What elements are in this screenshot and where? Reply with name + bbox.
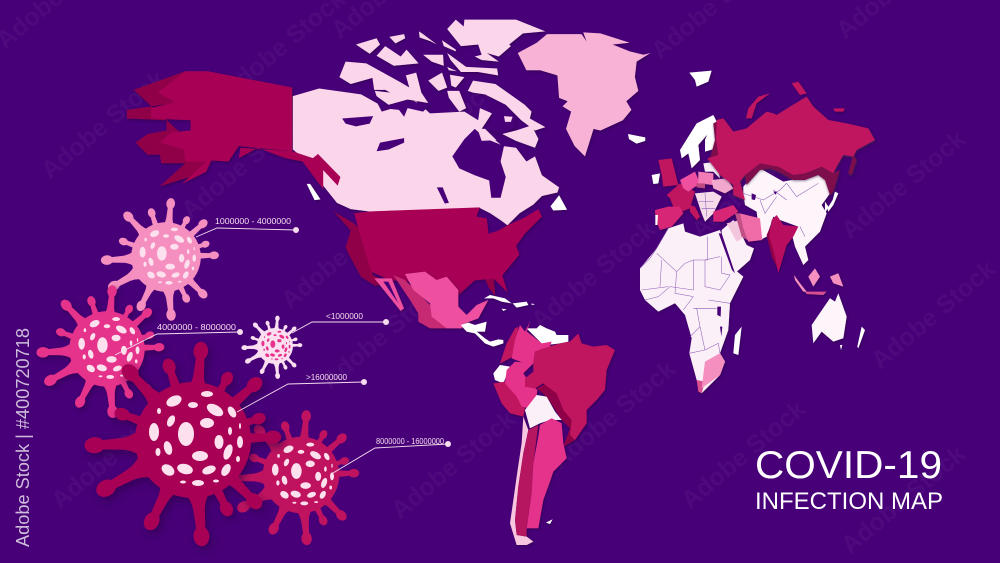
Austria and Czechia bbox=[697, 183, 705, 188]
Germany bbox=[680, 172, 700, 192]
Colombia shadow bbox=[500, 327, 518, 363]
Ireland bbox=[652, 173, 660, 184]
virus: over 16000000 bbox=[83, 340, 282, 549]
stock watermark pattern: Adobe Stock bbox=[46, 395, 181, 515]
stock image credit: Adobe Stock | #400720718 bbox=[13, 328, 33, 547]
Africa bbox=[640, 223, 743, 393]
Indonesia bbox=[794, 268, 843, 295]
Baltics and Belarus bbox=[703, 162, 720, 178]
Turkey bbox=[713, 205, 738, 222]
callout: 8000000 - 16000000: 8000000 - 16000000 bbox=[376, 437, 444, 446]
USA shadow layer bbox=[334, 211, 390, 286]
Russia bbox=[707, 97, 875, 200]
Falkland Islands bbox=[546, 519, 553, 524]
stock watermark pattern: Adobe Stock bbox=[546, 355, 681, 475]
callout: 4000000 - 8000000 bbox=[115, 323, 243, 355]
virus: 8000000 - 16000000 bbox=[228, 409, 360, 547]
callout: under 1000000: <1000000 bbox=[326, 312, 364, 321]
Balkans bbox=[695, 192, 722, 222]
virus: 4000000 - 8000000 bbox=[36, 284, 165, 420]
Caribbean bbox=[484, 295, 535, 311]
callout: 1000000 - 4000000 bbox=[196, 217, 299, 237]
callout: under 1000000 bbox=[292, 312, 389, 333]
map: North America bbox=[127, 20, 650, 296]
Asia bbox=[743, 168, 832, 265]
South Africa bbox=[697, 380, 705, 393]
Scandinavia bbox=[680, 115, 717, 168]
Canada bbox=[293, 20, 559, 225]
Vancouver Island bbox=[307, 184, 320, 200]
Spain bbox=[655, 207, 683, 230]
Ukraine bbox=[712, 178, 733, 193]
Brazil shadow bbox=[537, 383, 575, 447]
Alaska shadow layer bbox=[127, 71, 210, 186]
Italy bbox=[690, 205, 700, 220]
stock watermark pattern: Adobe Stock bbox=[526, 215, 661, 335]
Portugal bbox=[655, 215, 658, 225]
Peru bbox=[505, 362, 537, 410]
Poland bbox=[698, 172, 713, 185]
United Kingdom bbox=[658, 158, 678, 187]
map: Europe, Africa, Asia, Oceania bbox=[640, 71, 875, 393]
title: COVID-19 bbox=[755, 444, 942, 487]
Argentina bbox=[527, 418, 567, 528]
Chile outer bbox=[510, 417, 533, 545]
Svalbard bbox=[689, 71, 712, 87]
callout: 4000000 - 8000000: 4000000 - 8000000 bbox=[157, 323, 237, 332]
Baja California bbox=[374, 278, 404, 311]
Madagascar bbox=[733, 327, 742, 355]
virus: under 1000000 bbox=[241, 315, 303, 380]
stock watermark pattern: Adobe Stock bbox=[176, 105, 311, 225]
USA bbox=[354, 207, 542, 296]
virus: 1000000 - 4000000 bbox=[100, 197, 219, 322]
Newfoundland bbox=[550, 195, 567, 210]
Iceland bbox=[628, 134, 645, 144]
stock watermark pattern: Adobe Stock bbox=[316, 275, 451, 395]
Mexico bbox=[405, 272, 488, 328]
Japan and Korea bbox=[825, 192, 838, 213]
Brazil bbox=[525, 333, 615, 440]
stock watermark pattern: Adobe Stock bbox=[866, 255, 1000, 375]
New Zealand bbox=[857, 327, 865, 348]
title: INFECTION MAP bbox=[755, 488, 943, 515]
callout: 1000000 - 4000000: 1000000 - 4000000 bbox=[215, 217, 292, 226]
callout: over 16000000: >16000000 bbox=[306, 373, 348, 382]
Alaska panhandle bbox=[239, 148, 340, 189]
stock watermark pattern: Adobe Stock bbox=[836, 125, 971, 245]
stock watermark pattern: Adobe Stock bbox=[386, 405, 521, 525]
title bbox=[755, 444, 943, 515]
Ecuador bbox=[493, 365, 510, 383]
Hudson Bay and lakes bbox=[342, 100, 516, 204]
stock watermark pattern: Adobe Stock bbox=[366, 75, 501, 195]
callout: 8000000 - 16000000 bbox=[333, 437, 451, 473]
Alaska bbox=[151, 71, 292, 184]
callout: over 16000000 bbox=[237, 373, 367, 412]
stock watermark pattern: Adobe Stock bbox=[276, 195, 411, 315]
Peru shadow bbox=[493, 382, 525, 417]
stock watermark pattern: Adobe Stock bbox=[36, 65, 171, 185]
Australia bbox=[812, 293, 847, 343]
Mexico shadow bbox=[393, 275, 447, 328]
Greenland bbox=[518, 32, 650, 156]
virus legend bbox=[36, 197, 360, 549]
Colombia bbox=[512, 321, 552, 363]
stock watermark pattern: Adobe Stock bbox=[676, 395, 811, 515]
Central America bbox=[461, 322, 503, 347]
Arabia bbox=[719, 220, 754, 273]
France bbox=[667, 183, 695, 212]
India bbox=[767, 220, 778, 270]
stock watermark pattern: Adobe Stock bbox=[686, 125, 821, 245]
stock watermark pattern: Adobe Stock bbox=[836, 440, 971, 560]
Russian Arctic islands bbox=[746, 82, 845, 118]
Venezuela and Guianas bbox=[527, 325, 568, 345]
map: Central and South America bbox=[374, 272, 615, 545]
Argentina shadow bbox=[515, 425, 538, 537]
Bolivia bbox=[525, 395, 562, 428]
Iran bbox=[735, 213, 750, 242]
